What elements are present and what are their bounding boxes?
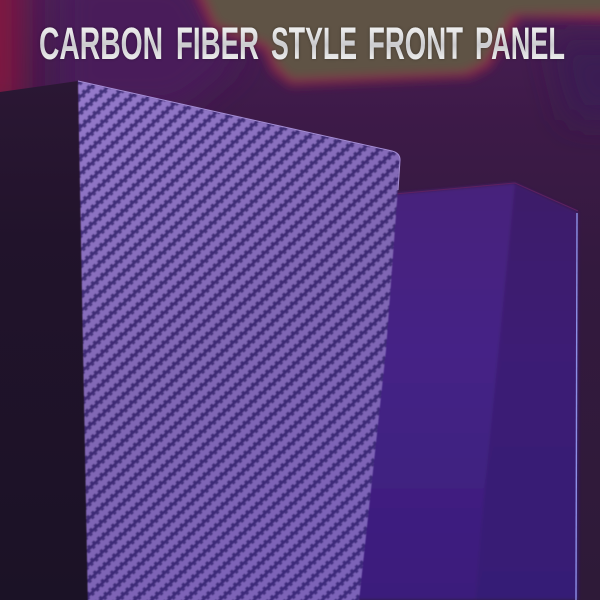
- title shadow: FIBER: [176, 18, 259, 69]
- title words: [39, 18, 565, 69]
- right panel faces: [340, 183, 578, 600]
- right panel top edge: [395, 183, 578, 211]
- title shadow: [39, 18, 565, 69]
- left panel: [0, 81, 400, 600]
- title shadow: STYLE: [271, 18, 357, 69]
- title words: FRONT: [368, 18, 463, 69]
- title shadow: FRONT: [368, 18, 463, 69]
- right panel: [340, 183, 578, 600]
- title words: CARBON: [39, 18, 163, 69]
- title: [39, 18, 565, 69]
- title shadow: CARBON: [39, 18, 163, 69]
- title words: STYLE: [271, 18, 357, 69]
- front highlight edge: [78, 81, 400, 190]
- blurred olive sign with red edge: [192, 0, 600, 86]
- left panel dark side: [0, 81, 88, 600]
- title words: FIBER: [176, 18, 259, 69]
- right panel lit edge: [576, 213, 577, 600]
- carbon fiber front: [78, 81, 400, 600]
